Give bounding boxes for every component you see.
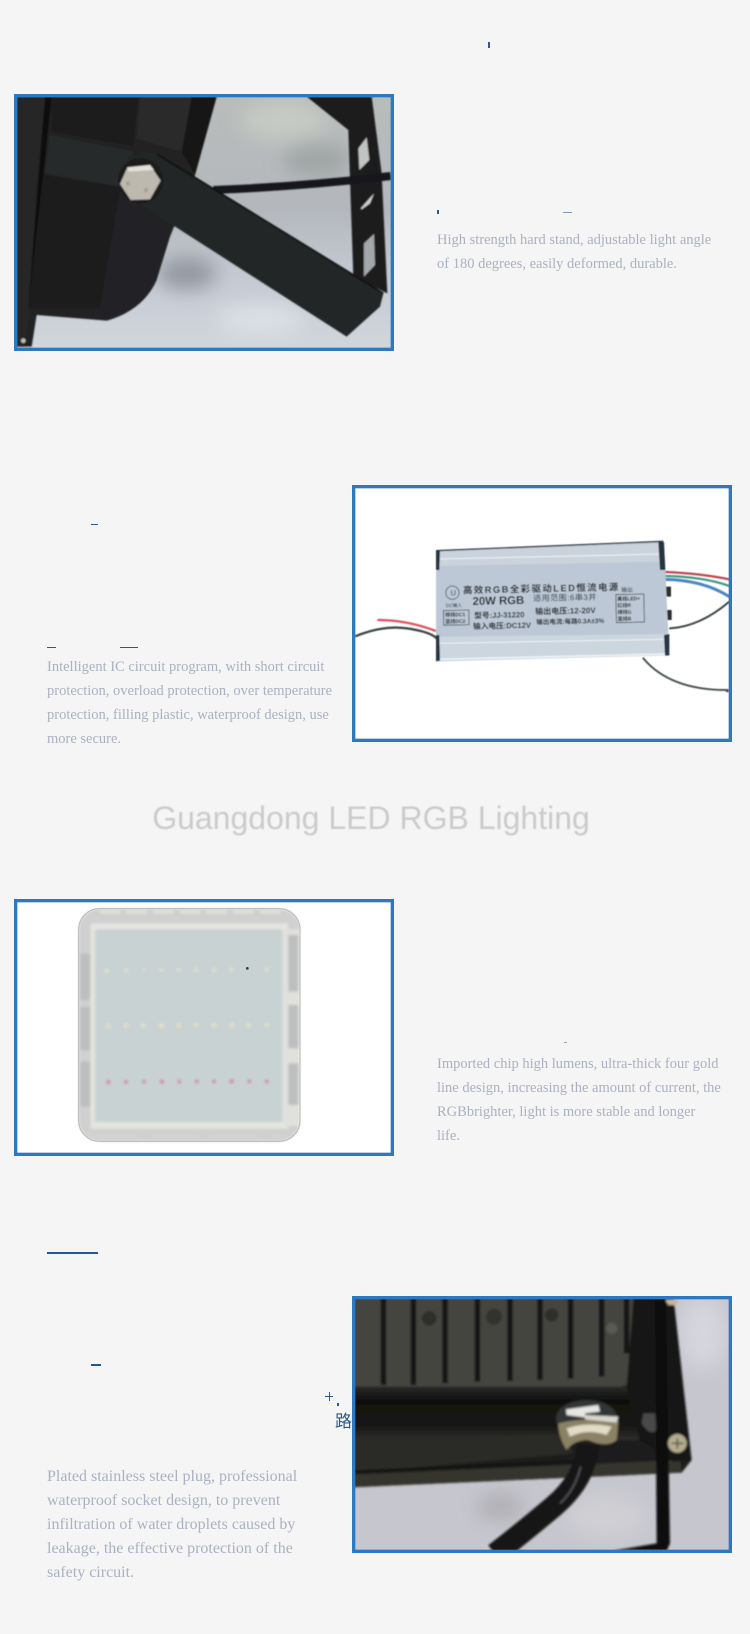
- text block: chip description: RGBbrighter, light is more stable and longer: [437, 1104, 695, 1120]
- photo panel: adjustable bracket: #: [144, 186, 149, 195]
- heading fragment: marks above bracket text: [437, 210, 572, 214]
- label text: 输出电压:12-20V: [535, 605, 596, 616]
- cable: [213, 176, 391, 190]
- ribs: [383, 1298, 627, 1385]
- label text: 蓝线B: [618, 615, 632, 623]
- heading fragment: vertical characters beside plug photo: 路: [335, 1412, 352, 1431]
- photo panel: adjustable bracket: [14, 94, 394, 351]
- wires: [356, 572, 729, 692]
- text block: plug description: infiltration of water droplets caused by: [47, 1516, 295, 1533]
- heading fragment: small stroke: [91, 1364, 101, 1366]
- text block: plug description: waterproof socket design, to prevent: [47, 1492, 280, 1509]
- label text: U: [451, 588, 456, 597]
- label text: 适用范围:6串3并: [533, 592, 597, 603]
- mounting pegs: [422, 1311, 437, 1326]
- housing: [17, 97, 217, 347]
- title: Guangdong LED RGB Lighting: [152, 800, 590, 836]
- heading fragment: marks above driver text: [47, 647, 138, 648]
- text block: chip description: Imported chip high lumens, ultra-thick four gold: [437, 1056, 718, 1072]
- label text: 绿线G: [617, 609, 632, 616]
- label text: 输出电流:每路0.3A±3%: [536, 616, 605, 626]
- text block: driver description: Intelligent IC circuit program, with short circuit: [47, 659, 324, 675]
- label text: 20W RGB: [472, 595, 524, 608]
- text block: plug description: leakage, the effective protection of the: [47, 1540, 293, 1557]
- heading fragment: mark above chip text: [564, 1042, 567, 1043]
- text block: driver description: [47, 659, 332, 747]
- photo panel: adjustable bracket: K: [126, 179, 131, 188]
- text block: plug description: Plated stainless steel plug, professional: [47, 1468, 297, 1485]
- text block: chip description: line design, increasing the amount of current, the: [437, 1080, 721, 1096]
- label text: 高效RGB全彩驱动LED恒流电源: [463, 581, 620, 595]
- strap: [120, 153, 383, 337]
- text block: plug description: safety circuit.: [47, 1564, 134, 1581]
- heading fragment: top mark: [488, 42, 490, 48]
- label text: 黑线LED+: [617, 595, 640, 603]
- text block: bracket description: of 180 degrees, easily deformed, durable.: [437, 256, 677, 272]
- text block: driver description: protection, filling plastic, waterproof design, use: [47, 707, 329, 723]
- label text: 输出: [621, 586, 633, 594]
- text block: plug description: [47, 1468, 297, 1581]
- text block: driver description: protection, overload protection, over temperature: [47, 683, 332, 699]
- text block: bracket description: High strength hard stand, adjustable light angle: [437, 232, 711, 248]
- label text: 输入电压:DC12V: [473, 620, 532, 631]
- heading fragment: rule above plug section: [47, 1252, 98, 1254]
- label text: 棕线DC1: [445, 611, 466, 619]
- heading fragment: mark above driver section: [91, 524, 98, 525]
- text block: chip description: [437, 1056, 721, 1144]
- label text: DC输入: [446, 602, 462, 609]
- text block: driver description: more secure.: [47, 731, 121, 747]
- photo panel: LED chip: [14, 899, 394, 1156]
- text block: bracket description: [437, 232, 711, 272]
- cable gland: [556, 1400, 617, 1437]
- label text: 型号:JJ-31220: [474, 609, 525, 620]
- bolt: [120, 165, 161, 200]
- label text: 蓝线DC2: [445, 618, 466, 625]
- right panel: [627, 1298, 690, 1462]
- cable: [495, 1445, 588, 1554]
- photo panel: waterproof plug: [352, 1296, 732, 1553]
- text block: chip description: life.: [437, 1128, 460, 1144]
- right frame: [307, 97, 387, 293]
- bracket: [613, 1298, 670, 1551]
- label text: 红线R: [617, 602, 631, 609]
- label text: [443, 581, 645, 632]
- photo panel: LED driver: [352, 485, 732, 742]
- screw: [668, 1434, 687, 1453]
- box: [436, 541, 669, 661]
